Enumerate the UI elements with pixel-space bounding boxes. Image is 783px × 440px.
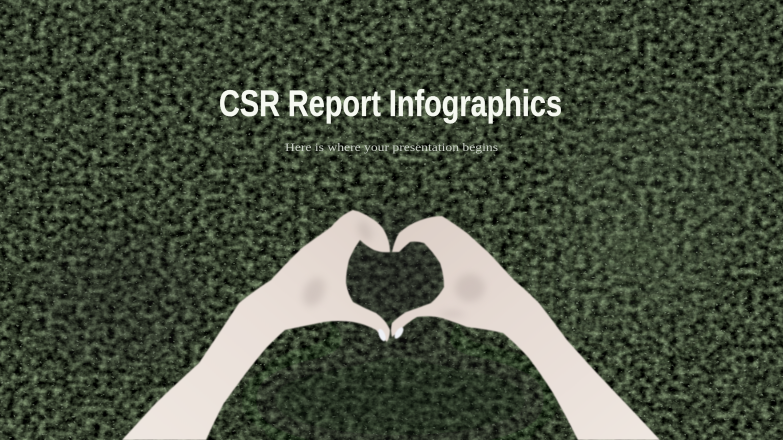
left thumb nail bbox=[377, 328, 387, 342]
right arm and hand bbox=[391, 216, 660, 440]
heart-shaped hands bbox=[122, 210, 660, 440]
hand shading bbox=[299, 218, 485, 317]
left arm and hand bbox=[122, 210, 390, 440]
title: CSR Report Infographics bbox=[219, 83, 562, 124]
right thumb nail bbox=[393, 326, 405, 340]
subtitle: Here is where your presentation begins bbox=[285, 140, 498, 154]
